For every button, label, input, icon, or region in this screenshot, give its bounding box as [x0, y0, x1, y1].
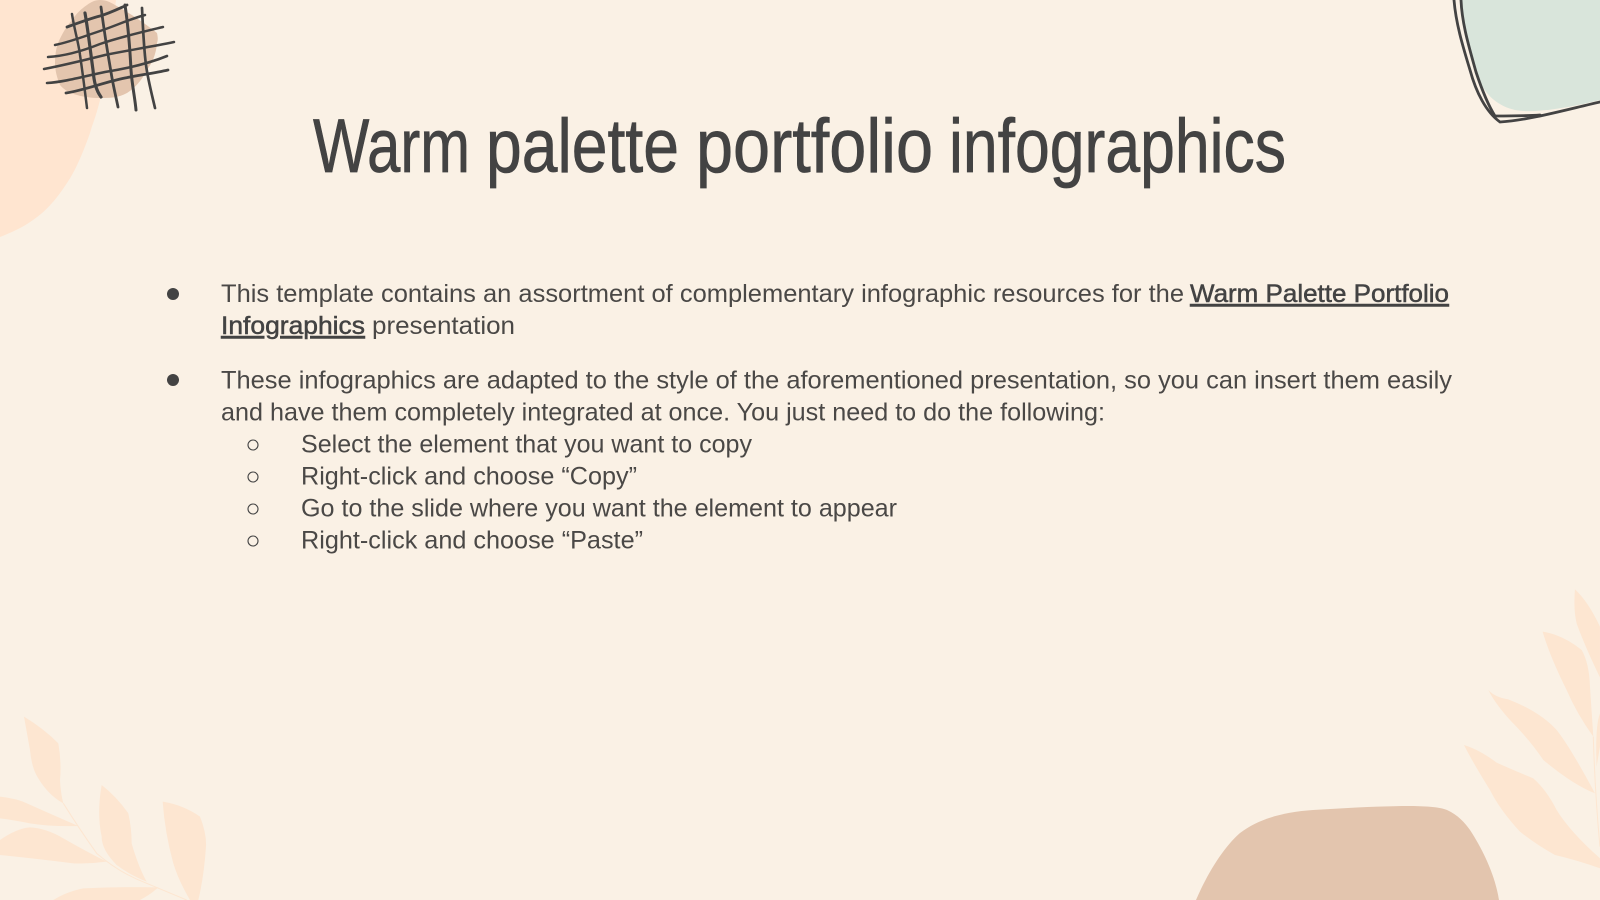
icon: tan blob with hand-drawn grid — [44, 0, 174, 110]
bullet 1 text line 2: presentation — [372, 312, 515, 340]
blob: peach top-left — [0, 0, 116, 237]
bullet 2 — [167, 374, 179, 386]
title: infographics — [949, 104, 1286, 189]
step 4: Right-click and choose “Paste” — [301, 526, 643, 554]
title: portfolio — [696, 104, 933, 189]
step 1: Select the element that you want to copy — [301, 430, 752, 458]
title — [313, 104, 1286, 189]
bullet 2 text line 2: and have them completely integrated at once. You just need to do the following: — [221, 398, 1105, 426]
sub-bullet 2 — [248, 472, 258, 482]
decoration: leaves bottom-right — [1464, 589, 1600, 868]
bullet 1 — [167, 288, 179, 300]
text block: instructions list — [167, 280, 1453, 554]
bullet 2 text line 1: These infographics are adapted to the style of the aforementioned presentation, so you can insert them easily — [221, 366, 1453, 394]
decoration: leaves bottom-left — [0, 717, 206, 900]
title: Warm — [313, 104, 470, 189]
link: Warm Palette Portfolio: Warm Palette Portfolio — [1190, 280, 1449, 308]
title: palette — [486, 104, 679, 189]
step 3: Go to the slide where you want the element to appear — [301, 494, 897, 522]
sub-bullet 3 — [248, 504, 258, 514]
sub-bullet 4 — [248, 536, 258, 546]
bullet 1 text line 1: This template contains an assortment of complementary infographic resources for the — [221, 280, 1184, 308]
link: Infographics: Infographics — [221, 312, 365, 340]
sub-bullet 1 — [248, 440, 258, 450]
blob: mint top-right with outline — [1454, 0, 1600, 122]
blob: tan bottom-right — [1196, 806, 1499, 900]
step 2: Right-click and choose “Copy” — [301, 462, 637, 490]
